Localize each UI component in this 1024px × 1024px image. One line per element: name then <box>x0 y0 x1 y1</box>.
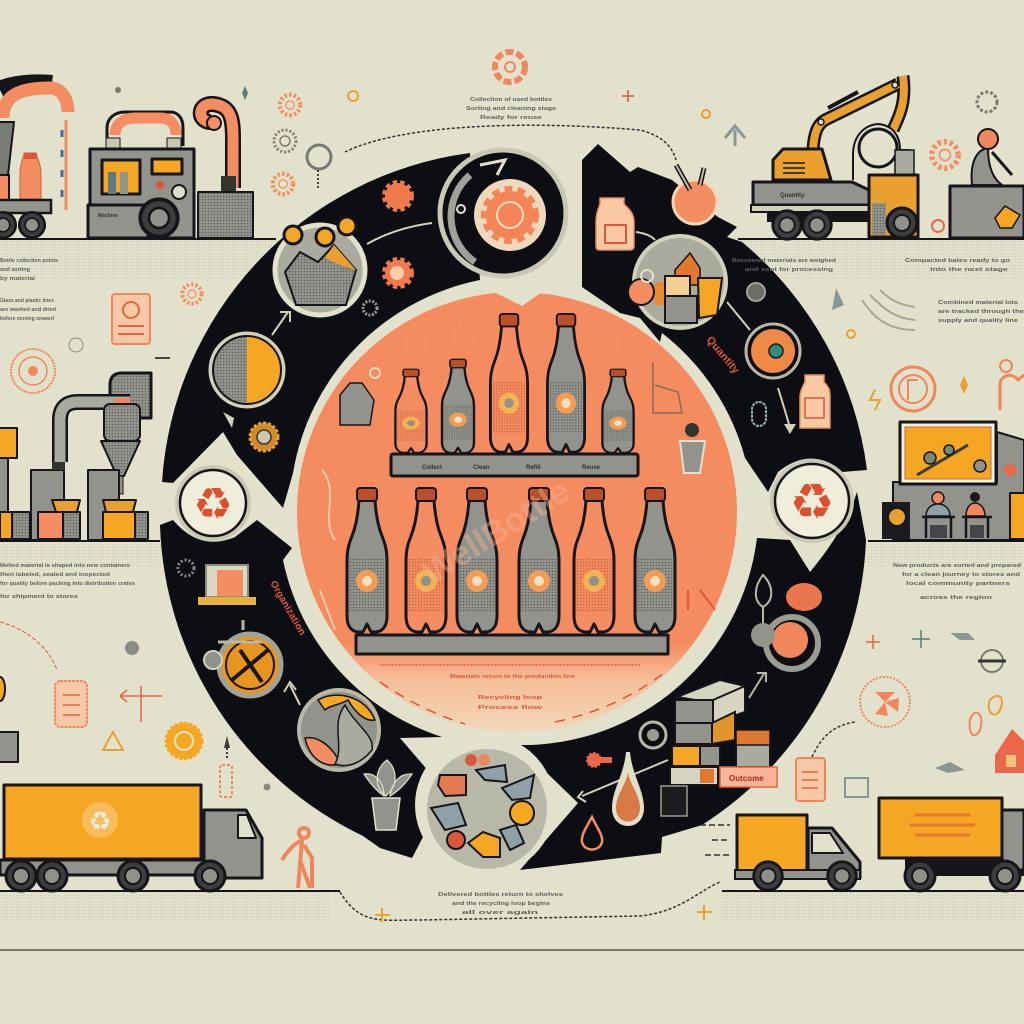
ring details: top right: Quantity <box>704 334 742 377</box>
right lower text block: across the region <box>920 595 992 601</box>
left processing plant <box>0 373 151 540</box>
left text block: top: are washed and dried <box>0 307 56 313</box>
step: right recycling circle: ♻ <box>790 473 834 531</box>
top right worker machine and icons <box>832 92 1024 411</box>
ring details: left lower <box>178 560 307 637</box>
potted plant <box>364 760 412 830</box>
left text block: lower: for shipment to stores <box>0 594 78 600</box>
left text block: top: Bottle collection points <box>0 258 58 264</box>
watermark: WellBottle <box>416 472 577 592</box>
excavator: Quantity <box>780 193 805 199</box>
left text block: lower: then labeled, sealed and inspected <box>0 572 110 578</box>
upper shelf: Clean <box>473 465 490 471</box>
top left production machine <box>88 104 253 238</box>
right upper text block <box>732 258 1024 324</box>
top left decorative icons <box>115 52 745 194</box>
right lower icons <box>375 630 1024 922</box>
step: earth circle <box>284 682 379 770</box>
top center caption: Collection of used bottles <box>470 97 552 103</box>
central caption <box>380 665 668 724</box>
step: scrap circle <box>275 217 365 315</box>
ring details: top right <box>636 232 830 434</box>
upper bottle row <box>395 314 634 453</box>
left text block: top <box>0 258 58 322</box>
step: orange flask <box>673 165 717 224</box>
left icons: document and targets <box>11 284 202 393</box>
left text block: top: by material <box>0 276 36 282</box>
gear icons on ring <box>363 183 432 315</box>
right lower text block <box>893 563 1021 601</box>
bottom center caption: all over again <box>462 910 538 916</box>
left text block: lower: Melted material is shaped into new containers <box>0 563 130 569</box>
ring details: left lower: Organization <box>267 579 307 637</box>
left text block: top: before moving onward <box>0 316 54 322</box>
right lower text block: New products are sorted and prepared <box>893 563 1021 569</box>
right upper text block: supply and quality line <box>938 318 1018 324</box>
black cycle ring <box>160 144 867 870</box>
large yellow truck <box>0 785 262 891</box>
right ring details <box>749 575 822 698</box>
central orange circle <box>297 275 737 732</box>
right factory with display <box>882 422 1024 540</box>
left text block: top: Glass and plastic lines <box>0 298 54 304</box>
small motifs on orange circle <box>320 323 715 630</box>
ring segment: bottom left <box>160 520 442 858</box>
small delivery truck <box>700 815 860 890</box>
right upper text block: Combined material lots <box>938 300 1018 306</box>
step: wheel icon <box>204 620 281 696</box>
ring segment: top left <box>162 153 480 508</box>
step: stacked boxes: Outcome <box>729 774 764 783</box>
step: left recycling circle <box>175 465 251 541</box>
bottom center caption: Delivered bottles return to shelves <box>438 892 563 898</box>
large delivery truck at right <box>879 798 1024 891</box>
central caption: Materials return to the production line <box>450 674 575 680</box>
right upper text block: Compacted bales ready to go <box>905 258 1010 264</box>
step: stacked boxes <box>640 680 777 816</box>
walking figure <box>282 828 312 888</box>
bottom center caption <box>438 892 563 916</box>
ground lines and halftone bands <box>0 239 1024 950</box>
large yellow truck: ♻ <box>88 807 112 837</box>
central caption: Process flow <box>478 705 542 711</box>
right upper text block: into the next stage <box>930 267 1008 273</box>
upper shelf <box>391 454 638 476</box>
excavator <box>751 76 918 239</box>
right upper text block: Recovered materials are weighed <box>732 258 836 264</box>
step: drop icons <box>578 752 668 850</box>
left text block: top: and sorting <box>0 267 30 273</box>
top center caption: Sorting and cleaning stage <box>466 106 556 112</box>
right lower text block: local community partners <box>906 581 1010 587</box>
gear on left ring <box>250 423 278 451</box>
step: packaging circle <box>628 236 726 328</box>
top center caption: Ready for reuse <box>480 115 542 121</box>
ring segment: bottom right <box>518 492 866 870</box>
lower shelf <box>356 635 668 654</box>
lower bottle row <box>347 488 675 632</box>
ring segment: top right <box>582 144 867 492</box>
step: half pie circle <box>211 312 290 428</box>
step: orange disc <box>746 324 800 378</box>
upper shelf: Reuse <box>582 465 601 471</box>
step: gear circle <box>440 150 566 276</box>
central caption: Recycling loop <box>478 695 542 701</box>
step: bottle icon <box>596 198 634 250</box>
step: left recycling circle: ♻ <box>193 479 233 530</box>
left lower icons <box>0 622 270 797</box>
top center caption <box>466 97 556 121</box>
step: recycle loop circle <box>415 735 555 875</box>
top left pipe and bottle cart <box>0 83 68 238</box>
upper shelf: Refill <box>526 465 541 471</box>
right upper text block: and sent for processing <box>745 267 833 273</box>
dashed flow connectors <box>340 125 855 920</box>
upper shelf: Collect <box>422 465 442 471</box>
right lower text block: for a clean journey to stores and <box>902 572 1020 578</box>
right upper text block: are tracked through the <box>938 309 1024 315</box>
step: right recycling circle <box>770 459 854 543</box>
left text block: lower: for quality before packing into distribution crates <box>0 581 135 587</box>
left text block: lower <box>0 563 135 600</box>
bottom center caption: and the recycling loop begins <box>452 901 550 907</box>
top left production machine: Machine <box>98 213 118 219</box>
